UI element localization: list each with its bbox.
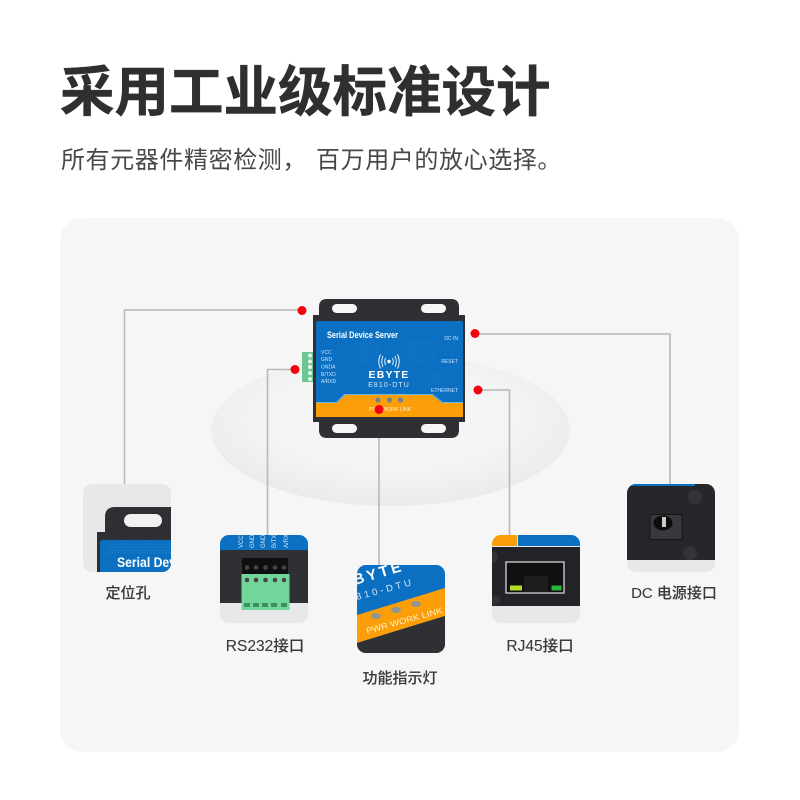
thumbnail: mounting hole: Serial Dev xyxy=(117,554,176,570)
thumbnail: RS232: VCC xyxy=(239,535,245,548)
thumbnail: mounting hole xyxy=(83,484,176,575)
device podium ellipse xyxy=(211,354,570,506)
pin labels: GND xyxy=(321,357,332,363)
port labels: RESET xyxy=(441,359,458,365)
callout dots xyxy=(290,306,482,414)
thumbnail: RS232: GND xyxy=(261,534,267,548)
title: 采用工业级标准设计 xyxy=(60,62,551,123)
panel: background xyxy=(60,218,739,752)
label: RJ45: RJ45接口 xyxy=(506,637,574,655)
pin labels xyxy=(321,350,337,385)
brand: EBYTE xyxy=(368,369,410,381)
world map texture xyxy=(350,338,443,392)
status leds xyxy=(375,397,403,403)
subtitle: 所有元器件精密检测， 百万用户的放心选择。 xyxy=(61,147,562,174)
led labels: PWR WORK LINK xyxy=(369,407,411,413)
thumbnail: DC power xyxy=(627,484,715,572)
label: RS232: RS232接口 xyxy=(226,637,304,655)
diagram xyxy=(60,218,739,752)
thumbnail: indicator lights: PWR WORK LINK xyxy=(365,605,444,636)
label: DC power: DC 电源接口 xyxy=(631,585,717,602)
device name: Serial Device Server xyxy=(327,330,398,340)
label: indicator lights: 功能指示灯 xyxy=(362,670,438,687)
pin labels: GNDA xyxy=(321,364,336,370)
pin labels: B/TXD xyxy=(321,372,336,378)
orange band highlight xyxy=(316,394,463,402)
pin labels: VCC xyxy=(321,350,332,356)
device: serial server xyxy=(302,299,465,438)
wifi logo xyxy=(379,354,399,368)
thumbnail: RJ45 xyxy=(486,535,580,623)
orange band xyxy=(316,395,463,417)
label: mounting hole: 定位孔 xyxy=(105,584,151,602)
blue face xyxy=(316,321,463,417)
port labels: DC IN xyxy=(444,336,458,342)
thumbnail: indicator lights: BYTE xyxy=(351,558,406,589)
thumbnail: indicator lights: 810-DTU xyxy=(355,577,415,603)
pin labels: A/RXD xyxy=(321,379,337,385)
thumbnail: indicator lights xyxy=(357,565,445,653)
mounting plate xyxy=(313,299,465,438)
port labels: ETHERNET xyxy=(431,388,458,394)
thumbnail: RS232: GND xyxy=(250,534,256,548)
thumbnail: RS232 xyxy=(220,534,308,623)
model: E810-DTU xyxy=(368,382,410,389)
thumbnail: RS232: A/RX xyxy=(284,534,290,548)
port labels xyxy=(431,336,458,394)
terminal block xyxy=(302,352,314,382)
thumbnail: RS232: B/TX xyxy=(272,535,278,548)
connector lines xyxy=(124,310,670,565)
mounting slots xyxy=(332,304,446,433)
